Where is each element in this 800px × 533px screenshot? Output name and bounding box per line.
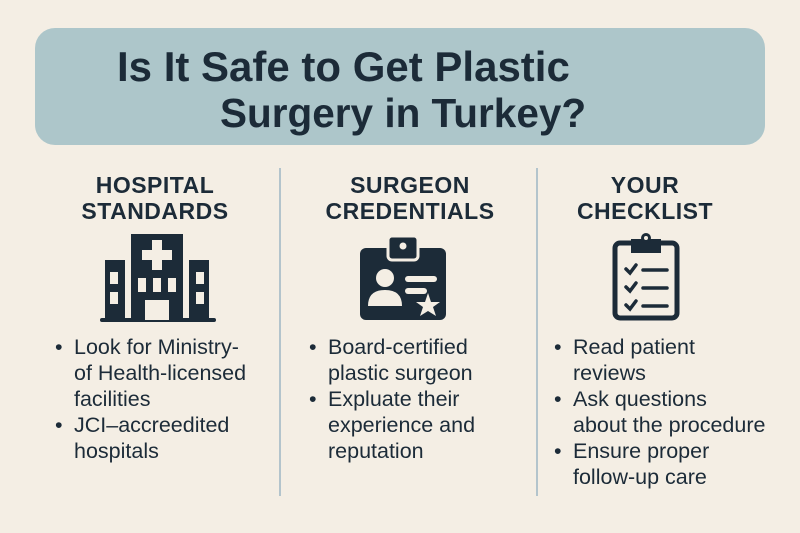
bullets: Read patient [573, 335, 695, 359]
bullets [554, 335, 765, 489]
bullets: reputation [328, 439, 424, 463]
panel: surgeon credentials [310, 172, 495, 463]
heading: CREDENTIALS [325, 198, 495, 224]
heading: HOSPITAL [96, 172, 214, 198]
bullets: plastic surgeon [328, 361, 473, 385]
heading: STANDARDS [81, 198, 229, 224]
bullets: Ask questions [573, 387, 707, 411]
bullets: of Health-licensed [74, 361, 246, 385]
panel: hospital standards [56, 172, 246, 463]
bullets: JCI–accreedited [74, 413, 229, 437]
bullets: Board-certified [328, 335, 468, 359]
heading: SURGEON [350, 172, 470, 198]
bullets: Ensure proper [573, 439, 709, 463]
heading: CHECKLIST [577, 198, 713, 224]
bullets: about the procedure [573, 413, 765, 437]
bullets: experience and [328, 413, 475, 437]
bullets: Expluate their [328, 387, 459, 411]
heading [325, 172, 495, 224]
bullets: reviews [573, 361, 646, 385]
bullets: facilities [74, 387, 150, 411]
title banner [35, 28, 765, 145]
bullets: hospitals [74, 439, 159, 463]
icon: clipboard [612, 233, 680, 320]
icon: hospital [100, 234, 216, 322]
bullets [56, 335, 246, 463]
title banner: Surgery in Turkey? [220, 90, 586, 136]
heading [577, 172, 713, 224]
title banner: Is It Safe to Get Plastic [117, 43, 570, 90]
heading: YOUR [611, 172, 679, 198]
bullets: follow-up care [573, 465, 707, 489]
icon: id badge [360, 238, 446, 320]
panel: your checklist [554, 172, 765, 489]
heading [81, 172, 229, 224]
bullets: Look for Ministry- [74, 335, 239, 359]
bullets [310, 335, 475, 463]
title [117, 43, 586, 136]
